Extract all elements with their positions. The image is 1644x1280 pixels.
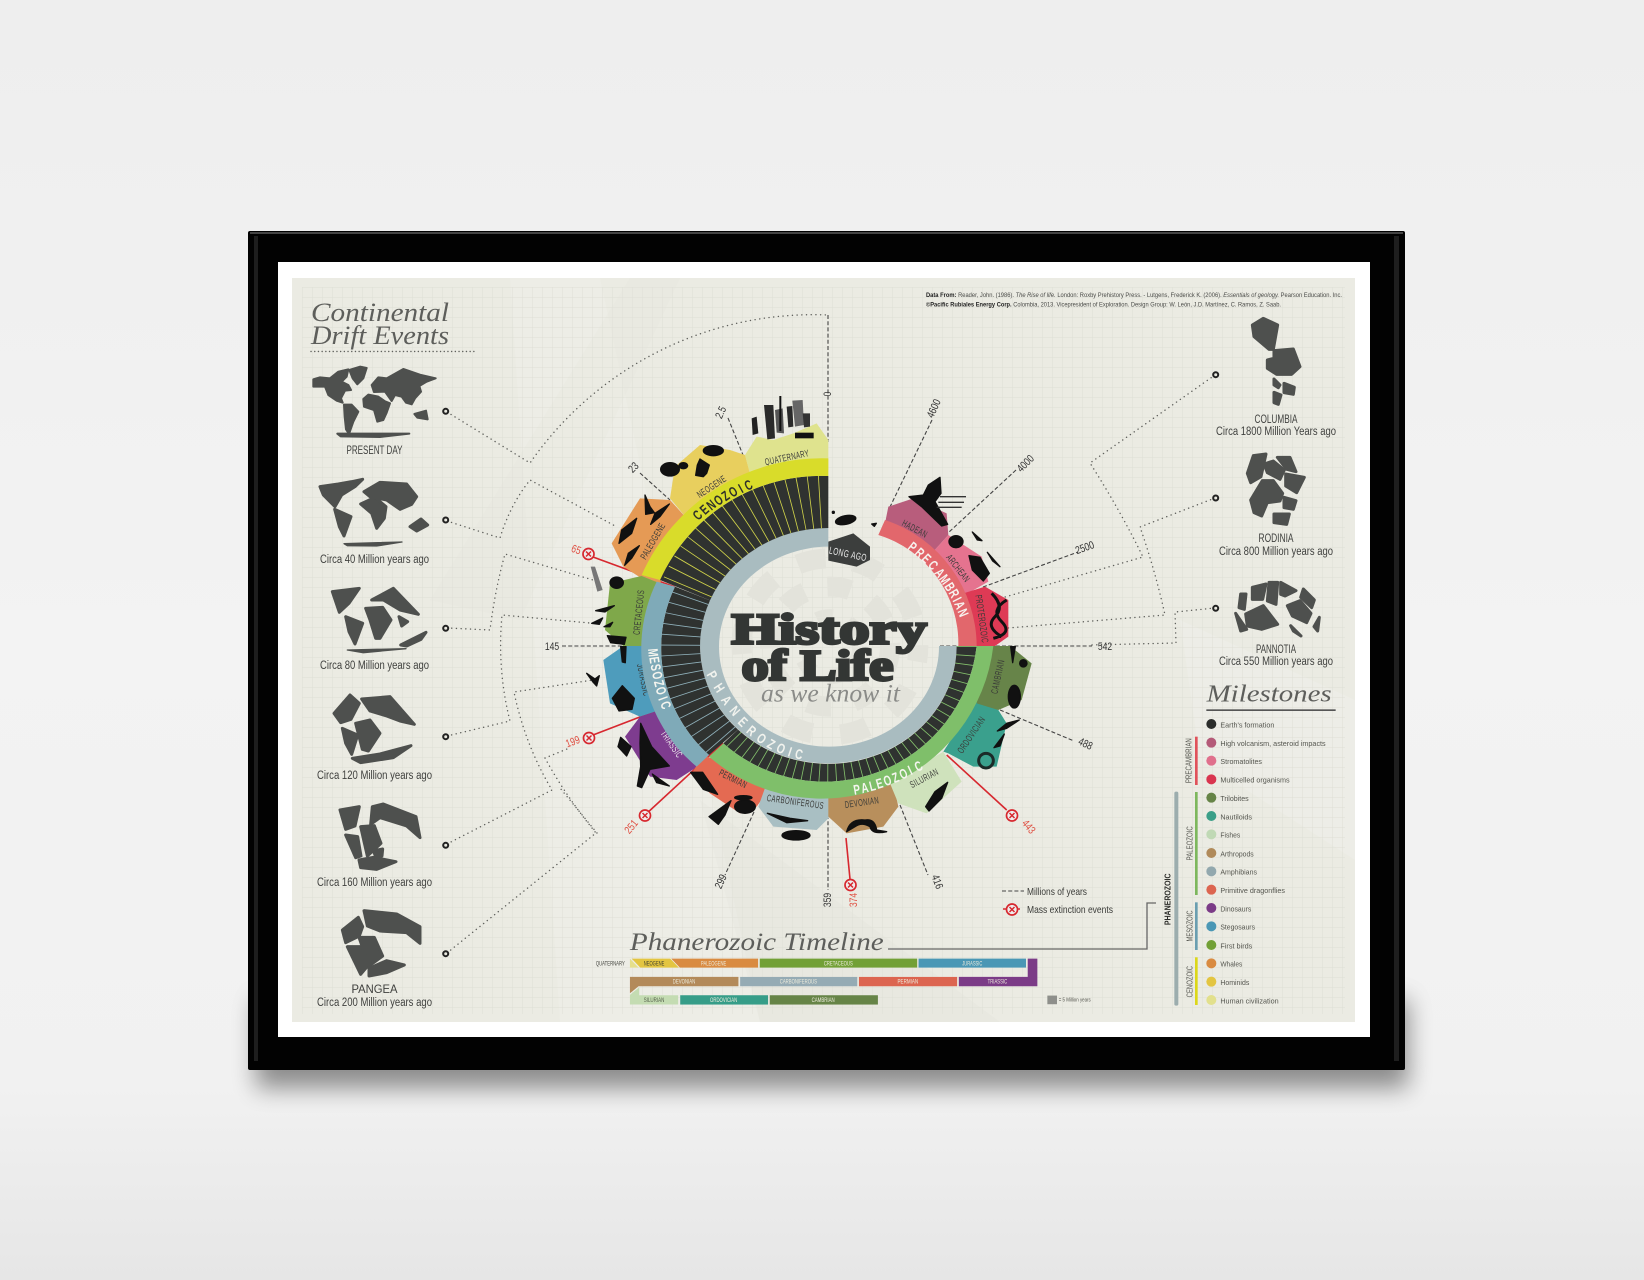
time scale numbers: 145 [545,641,560,653]
time scale numbers: 488 [1076,736,1095,753]
era band: precambrian: I [949,595,965,604]
timeline row 1: NEOGENE [644,961,664,968]
mass extinction markers: 251 [623,818,641,837]
era band: paleozoic: O [897,765,910,783]
milestones list: First birds [1220,941,1252,950]
period: permian: PERMIAN [717,767,749,791]
era band: precambrian [878,520,977,646]
phanerozoic label [703,668,804,763]
map captions, right column: Circa 1800 Million Years ago [1216,426,1336,438]
period: carboniferous [758,783,833,830]
era brackets: PALEOZOIC [1185,826,1195,860]
era band: paleozoic: E [874,775,885,792]
period: cambrian: CAMBRIAN [989,659,1007,695]
icons: paleogene animals [619,495,669,565]
timeline row 1: PALEOGENE [701,961,726,968]
timeline heading: Phanerozoic Timeline [629,927,884,956]
era band: precambrian: A [951,599,969,612]
continental maps, left column [313,367,436,653]
timeline row 2: TRIASSIC [988,979,1007,986]
period: silurian [890,752,962,813]
icon: proterozoic organisms [991,593,1007,638]
milestones list: Trilobites [1220,794,1249,803]
period: carboniferous: CARBONIFEROUS [766,793,825,811]
period: quaternary: QUATERNARY [764,448,810,468]
phanerozoic label: Z [764,736,778,753]
phanerozoic label: E [735,714,751,730]
era band: cenozoic: O [711,492,726,509]
icons: permian fauna [691,772,755,824]
milestones list: High volcanism, asteroid impacts [1220,739,1326,748]
phanerozoic timeline: QUATERNARY [596,961,625,968]
map captions, right column: Circa 800 Million years ago [1219,546,1333,558]
period: hadean [885,498,948,552]
timeline row 2: DEVONIAN [673,979,695,986]
milestones list: Nautiloids [1220,812,1252,821]
era band: mesozoic: O [649,670,666,681]
mass extinction markers: 374 [848,892,860,907]
era band: precambrian: R [912,545,928,561]
period: silurian: SILURIAN [908,766,940,790]
heading: continental drift events: Continental [311,298,449,327]
center backdrop pattern [742,558,918,735]
time scale numbers: 416 [928,873,945,891]
phanerozoic label: R [743,723,759,740]
period: devonian: DEVONIAN [844,795,880,810]
map: 160 Ma [340,804,420,869]
main title: of Life [742,642,893,690]
icons: hominids [661,446,723,477]
map captions, left column: PANGEA [352,984,398,996]
phanerozoic label: A [718,692,735,708]
timeline row 3 [630,987,878,1005]
era band: paleozoic: O [881,772,894,790]
mass extinction markers: 443 [1019,818,1038,837]
heading: continental drift events [310,298,477,352]
map captions, left column [317,445,432,1009]
era band: paleozoic: Z [890,769,902,786]
period: ordovician [943,700,1007,767]
era brackets: PHANEROZOIC [1163,873,1173,925]
timeline row 2: CARBONIFEROUS [780,979,817,986]
era band: paleozoic: P [852,781,861,798]
phanerozoic label: O [753,730,770,748]
era band: cenozoic: N [703,497,719,514]
period: cretaceous [605,576,660,646]
timeline row 1 [630,959,1026,968]
era brackets [1163,737,1198,1006]
era band: mesozoic: I [655,694,671,703]
map captions, right column: PANNOTIA [1256,644,1296,656]
era band: paleozoic: I [905,762,915,778]
heading: continental drift events: Drift Events [310,321,449,350]
timeline row 2 [630,959,1037,993]
icon: devonian fish [847,820,887,833]
white mat [278,262,1370,1037]
milestones list: Dinosaurs [1220,904,1251,913]
legend: Mass extinction events [1027,904,1113,916]
era band: precambrian: C [925,557,942,573]
era band: precambrian: N [954,606,972,619]
era band: cenozoic: C [742,476,755,494]
icons: cretaceous birds and asteroid [591,567,626,644]
era band: cenozoic: I [736,481,746,496]
period: proterozoic [963,587,1008,646]
period: paleogene: PALEOGENE [638,521,668,561]
era band: cenozoic: Z [718,487,733,504]
era brackets: PRECAMBRIAN [1183,738,1193,783]
period: permian [692,755,773,813]
era brackets: CENOZOIC [1185,966,1195,997]
period: devonian [828,783,898,833]
era band: cenozoic: E [697,502,712,518]
period: jurassic: JURASSIC [635,663,652,697]
era band: paleozoic: L [868,777,877,795]
map captions, left column: Circa 80 Million years ago [320,660,429,672]
map captions, right column: Circa 550 Million years ago [1219,656,1333,668]
time scale numbers [545,391,1112,907]
icons: amphibian and tree [767,813,810,840]
milestones heading: Milestones [1205,682,1332,708]
icons: ordovician nautilus [979,720,1019,768]
milestones list: Earth's formation [1220,720,1274,729]
time scale numbers: 0 [822,391,834,396]
milestones panel [1163,682,1336,1006]
icons: cambrian trilobites [1008,647,1027,708]
period: triassic [625,710,700,780]
era band: paleozoic: C [912,757,926,775]
period: archean [933,535,988,595]
period: jurassic [603,646,660,717]
dotted connectors: drift events [447,315,1215,953]
map: 40 Ma [320,479,428,546]
period: archean: ARCHEAN [944,552,972,584]
connector end rings [443,372,1218,956]
map captions, left column: Circa 120 Million years ago [317,770,432,782]
era band: mesozoic: Z [650,678,668,689]
milestones list: Human civilization [1220,996,1279,1005]
period: paleogene [612,498,687,583]
icons: archean stromatolites [949,532,1000,581]
icon: silurian arthropod [926,782,948,811]
picture frame [248,231,1405,1070]
milestones list: Multicelled organisms [1220,776,1290,785]
icon: asteroid [832,511,876,526]
time scale numbers: 23 [626,460,642,476]
period: cambrian [977,646,1032,710]
milestones list: Primitive dragonflies [1220,886,1285,895]
era band: mesozoic: S [647,663,664,672]
time scale numbers: 2500 [1074,539,1097,557]
time scale numbers: 359 [822,892,834,907]
period: proterozoic: PROTEROZOIC [973,594,990,644]
legend [1002,886,1113,916]
mass extinction markers: 65 [569,543,583,558]
legend: Millions of years [1027,886,1087,898]
period: hadean: HADEAN [900,518,929,540]
long ago rock [828,533,870,567]
era band: mesozoic: C [657,699,675,712]
period: ordovician: ORDOVICIAN [955,715,988,755]
timeline scale key: = 5 Million years [1059,998,1091,1004]
map: Rodinia [1247,454,1304,524]
era band: precambrian: P [905,539,920,555]
timeline row 1: JURASSIC [962,961,982,968]
map captions, right column: RODINIA [1258,533,1294,545]
milestones list: Arthropods [1220,849,1254,858]
time scale numbers: 4600 [925,397,944,420]
milestones list: Stegosaurs [1220,923,1255,932]
main title: as we know it [761,680,901,708]
era band: cenozoic: O [726,483,741,501]
milestones list: Hominids [1220,978,1249,987]
map: Pannotia [1236,582,1319,636]
icon: hadean volcano [909,477,966,526]
phanerozoic timeline [596,927,1091,1005]
phanerozoic label: P [703,668,721,682]
era band: cenozoic [642,458,828,580]
timeline connector to phanerozoic bracket [888,903,1156,949]
map: 120 Ma [334,695,414,763]
continental maps, right column [1236,318,1319,636]
icons: dinosaur [618,723,669,788]
time scale numbers: 4000 [1015,453,1037,475]
credits text: ©Pacific Rubiales Energy Corp. Colombia, 2013. Vicepresident of Exploration. Design Group: W. León, J.D. Martínez, C. Ramos, Z. Saab. [926,300,1281,308]
era band: precambrian: B [941,580,959,594]
timeline row 2: PERMIAN [898,979,918,986]
time scale numbers: 299 [713,872,730,891]
phanerozoic label: C [794,746,804,763]
timeline scale key [1047,996,1091,1004]
map captions, left column: Circa 200 Million years ago [317,997,432,1009]
timeline row 3: SILURIAN [644,997,665,1004]
era band: mesozoic [641,582,709,767]
history of life wheel [587,396,1032,840]
era band: precambrian: A [931,565,948,581]
milestones list: Amphibians [1220,868,1257,877]
map: 80 Ma [332,588,426,653]
map captions, left column: Circa 40 Million years ago [320,554,429,566]
period: triassic: TRIASSIC [658,729,685,760]
time scale numbers: 2.5 [713,404,730,421]
main title [732,605,927,708]
icons: jurassic animals [587,647,634,711]
era band: paleozoic [709,646,993,799]
map: Pangea [342,911,420,976]
era band: precambrian: E [918,551,934,567]
frame shadow [256,1000,1408,1088]
period: quaternary [745,423,828,480]
time scale numbers: 542 [1098,641,1112,653]
main title: History [732,605,927,653]
era brackets: MESOZOIC [1185,910,1195,941]
black band with tick marks [660,476,977,786]
phanerozoic label: I [786,744,794,760]
credits text [926,292,1342,308]
milestones list [1206,719,1326,1005]
gray inner ring [700,527,957,763]
era band: precambrian: R [945,586,963,601]
era band: mesozoic: M [645,648,661,657]
mass extinction markers [564,543,1038,907]
credits text: Data From: Reader, John. (1986). The Rise of life. London: Roxby Prehistory Press. - Lutgens, Frederick K. (2006). Essentials of geology. Pearson Education. Inc. [926,292,1342,299]
phanerozoic label: N [726,703,743,719]
milestones list: Fishes [1220,831,1240,840]
map: present day [313,367,436,437]
map captions, right column [1216,414,1336,668]
period: neogene: NEOGENE [695,473,728,500]
map captions, left column: Circa 160 Million years ago [317,877,432,889]
timeline row 1: CRETACEOUS [824,961,853,968]
map: Columbia [1252,318,1300,404]
timeline row 3: ORDOVICIAN [710,997,737,1004]
period: cretaceous: CRETACEOUS [631,589,647,635]
long ago rock: LONG AGO [828,544,868,564]
period: neogene [670,445,752,518]
map captions, left column: PRESENT DAY [346,445,403,457]
map captions, right column: COLUMBIA [1254,414,1298,426]
era band: precambrian: M [936,571,954,588]
icon: city silhouette [752,396,814,439]
timeline row 3: CAMBRIAN [812,997,835,1004]
era band: paleozoic: A [860,779,870,797]
mass extinction markers: 199 [564,734,582,751]
phanerozoic label: H [710,680,728,695]
time scale leader lines [562,315,1092,890]
poster panel [292,278,1355,1022]
era band: cenozoic: C [689,507,706,523]
milestones list: Whales [1220,960,1242,969]
milestones list: Stromatolites [1220,757,1262,766]
era band: mesozoic: O [652,685,670,697]
era band: mesozoic: E [646,656,663,664]
phanerozoic label: O [774,740,788,758]
